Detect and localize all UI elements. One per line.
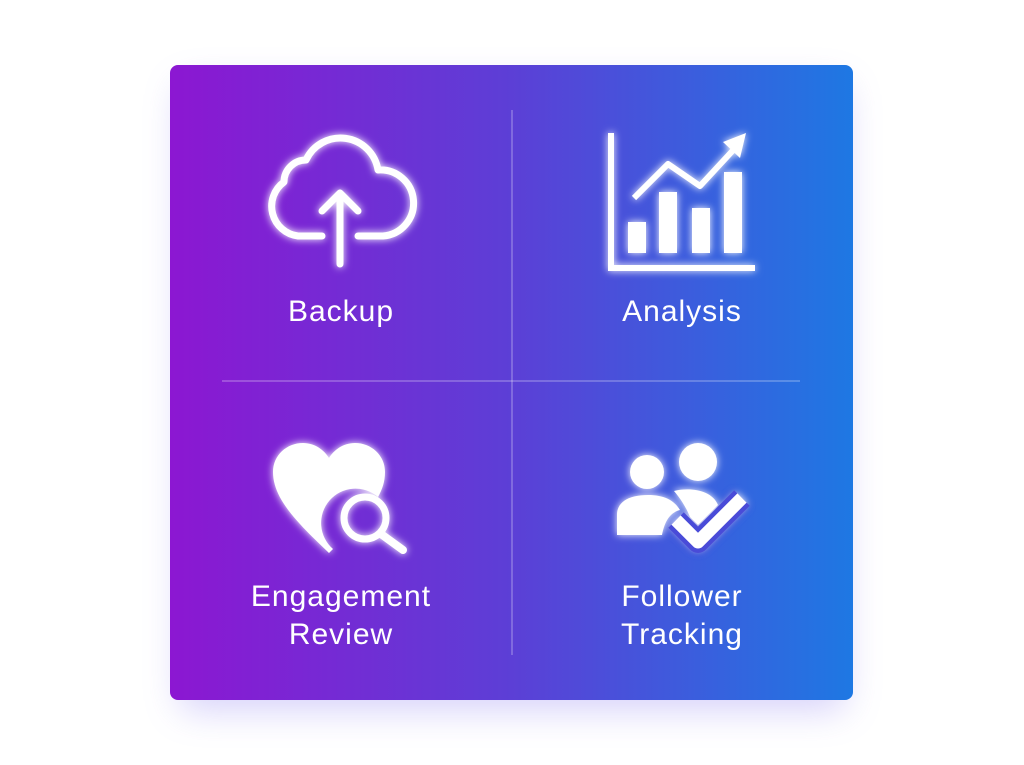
label: Engagement Review: Engagement (251, 580, 431, 613)
label: Analysis: Analysis (622, 295, 742, 328)
icon: cloud upload (272, 138, 414, 264)
icon: people with check (617, 443, 742, 542)
panel: follower tracking (617, 443, 743, 651)
panel: follower tracking: Tracking (621, 618, 743, 651)
panel: engagement review: Review (289, 618, 393, 651)
panel: engagement review (251, 443, 431, 651)
panel: analysis (611, 133, 755, 328)
label: Backup: Backup (288, 295, 394, 328)
card (170, 65, 853, 700)
panel: backup (272, 138, 414, 328)
icon: heart with magnifier (273, 443, 403, 553)
icon: bar chart (611, 133, 755, 268)
label: Follower Tracking: Follower (621, 580, 743, 613)
